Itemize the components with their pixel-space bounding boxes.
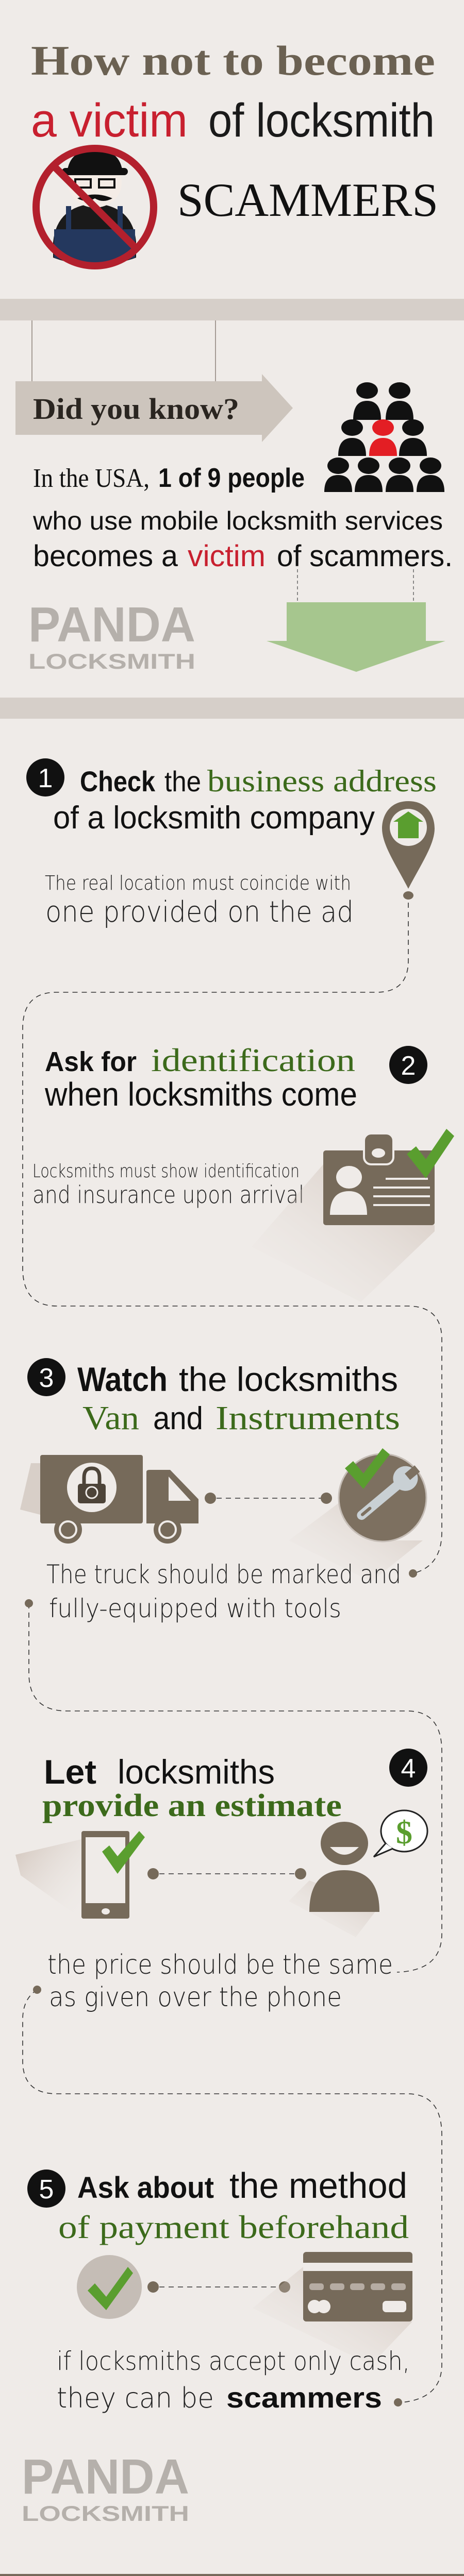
text 2: and insurance upon arrival xyxy=(32,1181,304,1209)
title: How not to become xyxy=(31,37,435,84)
text 3 xyxy=(46,1560,401,1623)
icon: person with dollar: $ xyxy=(396,1814,412,1851)
text 4: the price should be the same xyxy=(47,1950,393,1980)
icon: people pyramid xyxy=(324,382,444,492)
connector 4 xyxy=(147,1868,306,1879)
heading 4: locksmiths xyxy=(118,1753,275,1791)
heading 5: Ask about xyxy=(77,2171,214,2205)
text: statistic: 1 of 9 people xyxy=(158,463,305,493)
heading 5: of payment beforehand xyxy=(58,2209,409,2245)
icon: phone xyxy=(15,1831,145,1919)
number 5: 5 xyxy=(39,2175,54,2205)
step 3 xyxy=(20,1358,426,1623)
footer xyxy=(0,2574,464,2576)
arrow: did you know: Did you know? xyxy=(33,392,239,426)
number 1: 1 xyxy=(38,764,53,793)
text: statistic xyxy=(32,463,453,573)
icon: location pin xyxy=(382,801,435,900)
step 5 xyxy=(27,2165,412,2414)
step 2 xyxy=(32,1042,454,1302)
text 1 xyxy=(45,872,354,929)
text 1: one provided on the ad xyxy=(45,895,354,929)
number 2 xyxy=(389,1046,427,1084)
heading 4: Let xyxy=(44,1753,96,1791)
heading 3 xyxy=(77,1360,400,1437)
heading 4: provide an estimate xyxy=(42,1788,342,1823)
heading 2: when locksmiths come xyxy=(44,1076,357,1113)
icon: truck xyxy=(20,1455,198,1544)
text: statistic: who use mobile locksmith services xyxy=(32,506,443,535)
text: statistic: victim xyxy=(188,539,266,573)
icon: check circle xyxy=(77,2255,142,2319)
heading 1: Check xyxy=(80,765,156,798)
heading 2: identification xyxy=(151,1042,355,1078)
icon: wrench xyxy=(289,1448,426,1582)
text 5: scammers xyxy=(226,2381,382,2414)
text: statistic: becomes a xyxy=(33,539,178,573)
text 4 xyxy=(47,1950,393,2013)
heading 3: Instruments xyxy=(216,1399,400,1437)
arrow: green down xyxy=(267,602,445,672)
heading 1: of a locksmith company xyxy=(53,800,375,836)
icon: person with dollar xyxy=(289,1810,427,1937)
number 3: 3 xyxy=(39,1363,54,1393)
icon: no scammer xyxy=(36,148,154,266)
text 3: fully-equipped with tools xyxy=(49,1594,341,1623)
title: a victim xyxy=(31,94,188,147)
text 2: Locksmiths must show identification xyxy=(32,1161,300,1182)
heading 5 xyxy=(58,2165,409,2245)
arrow: did you know xyxy=(15,374,293,442)
connector 5 xyxy=(147,2281,290,2293)
heading 4 xyxy=(42,1753,342,1823)
logo: panda locksmith: PANDA xyxy=(28,597,195,652)
text 5: they can be xyxy=(57,2382,214,2414)
number 1 xyxy=(26,758,64,796)
text 4: as given over the phone xyxy=(49,1982,342,2013)
icon: credit card xyxy=(253,2252,412,2365)
connector 3 xyxy=(205,1493,332,1504)
logo: panda locksmith: LOCKSMITH xyxy=(28,649,195,673)
logo: panda locksmith bottom: LOCKSMITH xyxy=(22,2501,189,2526)
number 3 xyxy=(27,1358,65,1396)
heading 3: Watch xyxy=(77,1360,168,1398)
heading 3: the locksmiths xyxy=(179,1360,398,1398)
heading 2: Ask for xyxy=(45,1046,137,1077)
logo: panda locksmith bottom: PANDA xyxy=(22,2449,189,2504)
text 2 xyxy=(32,1161,304,1209)
number 4 xyxy=(389,1749,427,1787)
step 1 xyxy=(26,758,437,929)
title: SCAMMERS xyxy=(177,174,438,226)
text: statistic: In the USA, xyxy=(33,464,150,493)
number 5 xyxy=(27,2170,65,2208)
heading 3: and xyxy=(153,1401,203,1436)
title: of locksmith xyxy=(208,94,435,147)
number 4: 4 xyxy=(401,1754,416,1784)
step 4 xyxy=(15,1749,427,2013)
title xyxy=(31,37,438,226)
number 2: 2 xyxy=(401,1051,416,1081)
text 5 xyxy=(57,2346,410,2414)
heading 1: the xyxy=(164,765,201,798)
icon: id card xyxy=(252,1129,454,1302)
heading 3: Van xyxy=(82,1399,139,1437)
text 5: if locksmiths accept only cash, xyxy=(57,2346,410,2376)
heading 5: the method xyxy=(229,2165,407,2206)
text 1: The real location must coincide with xyxy=(45,872,351,894)
text 3: The truck should be marked and xyxy=(46,1560,401,1589)
text: statistic: of scammers. xyxy=(277,539,453,573)
heading 1 xyxy=(53,764,437,836)
dashed path xyxy=(23,903,442,2402)
heading 2 xyxy=(44,1042,357,1113)
heading 1: business address xyxy=(207,764,437,798)
